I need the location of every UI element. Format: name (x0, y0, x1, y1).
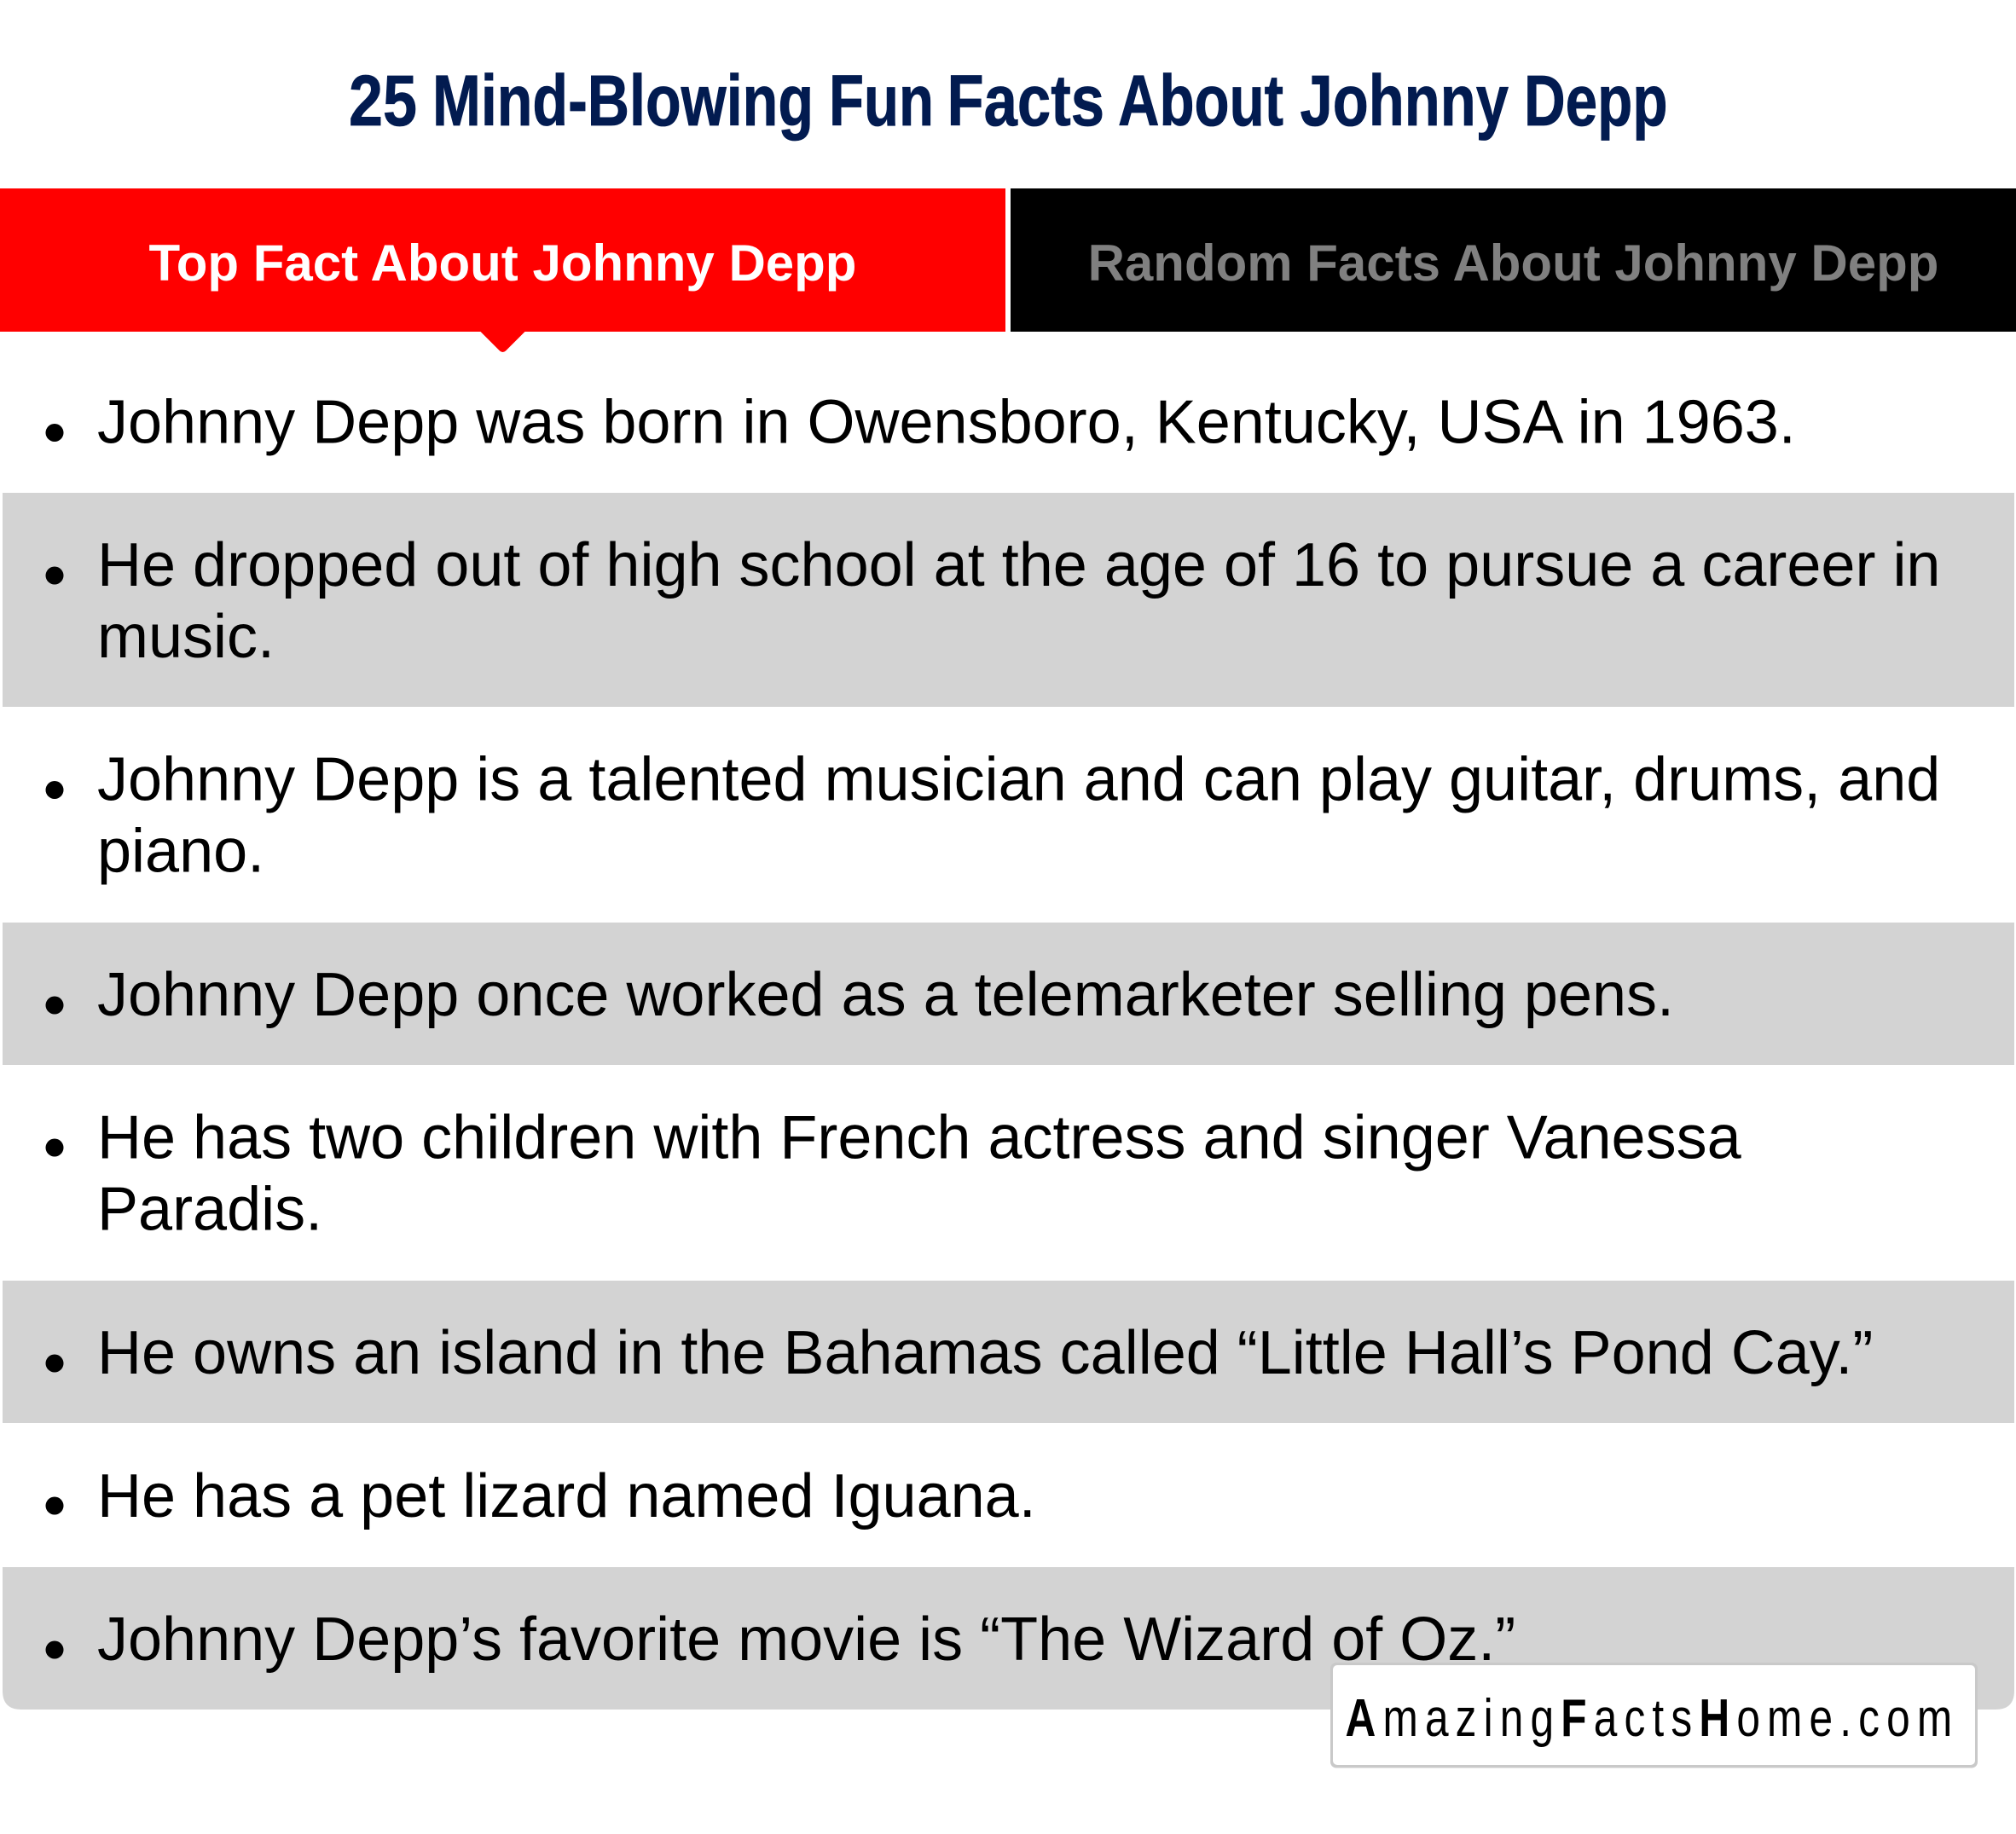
watermark badge (1330, 1663, 1978, 1768)
title: Fun (829, 61, 934, 141)
fact text 1: Johnny Depp was born in Owensboro, Kentucky, USA in 1963. (97, 389, 1796, 457)
fact text 3: Johnny Depp is a talented musician and can play guitar, drums, and (97, 745, 1940, 813)
fact text 8: Johnny Depp’s favorite movie is “The Wizard of Oz.” (97, 1605, 1515, 1674)
title: Facts (947, 61, 1104, 141)
fact text 5: He has two children with French actress and singer Vanessa (97, 1103, 1741, 1172)
tab: top fact (active) (0, 188, 1005, 352)
tab: random facts (inactive) (1011, 188, 2016, 332)
tab label: top fact: Top Fact About Johnny Depp (149, 234, 856, 292)
title: About (1118, 61, 1283, 141)
fact row 5 (46, 1103, 1742, 1243)
fact text 5: Paradis. (97, 1175, 322, 1243)
fact row 6 (3, 1281, 2014, 1423)
fact row 1 (46, 389, 1796, 457)
tab pointer arrow (479, 331, 525, 352)
fact row 7 (46, 1462, 1036, 1530)
title: Depp (1524, 61, 1668, 141)
fact row 2 (3, 493, 2014, 707)
watermark text: AmazingFactsHome.com (1346, 1688, 1959, 1747)
fact row 3 (46, 745, 1940, 885)
fact text 2: He dropped out of high school at the age of 16 to pursue a career in (97, 531, 1940, 599)
fact text 6: He owns an island in the Bahamas called “Little Hall’s Pond Cay.” (97, 1319, 1873, 1387)
title: Johnny (1300, 61, 1509, 141)
fact text 4: Johnny Depp once worked as a telemarketer selling pens. (97, 961, 1674, 1029)
fact row 8 (3, 1567, 2014, 1710)
title: 25 (349, 61, 417, 141)
fact text 3: piano. (97, 817, 264, 885)
fact text 7: He has a pet lizard named Iguana. (97, 1462, 1036, 1530)
tab label: random facts: Random Facts About Johnny Depp (1088, 234, 1938, 292)
fact row 4 (3, 923, 2014, 1065)
title: Mind-Blowing (432, 61, 814, 141)
fact text 2: music. (97, 603, 275, 671)
title (349, 61, 1668, 141)
